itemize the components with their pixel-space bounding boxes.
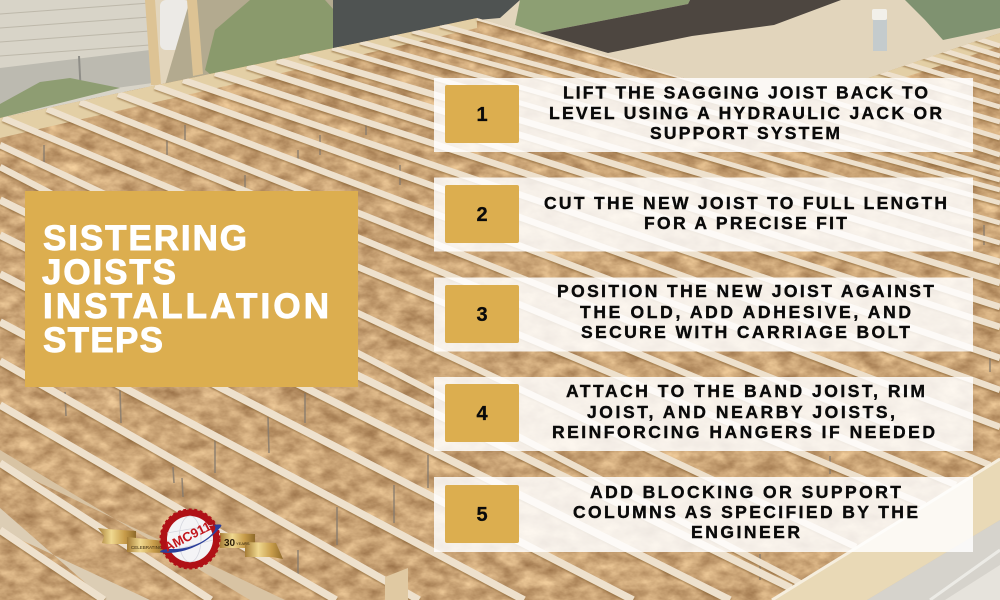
icon: vent pipe in sand xyxy=(872,9,887,51)
right ribbon: 30 xyxy=(224,538,236,549)
step 1 xyxy=(434,78,973,152)
title text xyxy=(42,219,329,360)
logo wordmark: AMC911 xyxy=(162,518,213,555)
step 5: 5 xyxy=(476,504,488,526)
step 3: POSITION THE NEW JOIST AGAINST xyxy=(557,281,934,301)
step 2: FOR A PRECISE FIT xyxy=(644,213,847,233)
step 4 xyxy=(434,377,973,451)
step 3: THE OLD, ADD ADHESIVE, AND xyxy=(580,302,911,322)
step 5: ADD BLOCKING OR SUPPORT xyxy=(590,482,901,502)
step 1: SUPPORT SYSTEM xyxy=(650,123,840,143)
left ribbon xyxy=(98,528,165,553)
photo background: site behind the floor xyxy=(0,0,1000,130)
right ribbon xyxy=(220,533,283,559)
globe xyxy=(167,516,213,562)
left ribbon: CELEBRATING xyxy=(131,545,163,550)
lumber blocks along far rim xyxy=(0,18,477,138)
beige planks lower left xyxy=(0,450,285,600)
step 3: SECURE WITH CARRIAGE BOLT xyxy=(581,322,910,342)
title text: SISTERING xyxy=(43,219,247,258)
darker seams on joist webs xyxy=(44,120,990,580)
title text: INSTALLATION xyxy=(43,287,329,326)
step 1: LEVEL USING A HYDRAULIC JACK OR xyxy=(549,103,942,123)
step 2: CUT THE NEW JOIST TO FULL LENGTH xyxy=(544,193,947,213)
photo: near rim board and concrete wall xyxy=(772,458,1000,600)
step 3: 3 xyxy=(476,304,488,326)
photo: upright stud at bottom xyxy=(385,568,408,600)
blue swoosh xyxy=(160,525,221,553)
red rosette xyxy=(160,510,220,568)
step 2: 2 xyxy=(476,204,488,226)
logo: AMC911 celebrating 30 years badge xyxy=(98,510,283,568)
step 4: REINFORCING HANGERS IF NEEDED xyxy=(552,422,935,442)
step 5 xyxy=(434,477,973,552)
title text: JOISTS xyxy=(42,253,176,292)
step 4: ATTACH TO THE BAND JOIST, RIM xyxy=(566,381,925,401)
step 4: 4 xyxy=(476,403,488,425)
step 5: ENGINEER xyxy=(691,522,800,542)
step 1: LIFT THE SAGGING JOIST BACK TO xyxy=(563,82,928,102)
step 5: COLUMNS AS SPECIFIED BY THE xyxy=(573,502,918,522)
right ribbon: YEARS xyxy=(236,541,250,546)
step 3 xyxy=(434,278,973,352)
step 1: 1 xyxy=(476,104,488,126)
step 2 xyxy=(434,178,973,252)
step 4: JOIST, AND NEARBY JOISTS, xyxy=(587,402,895,422)
title text: STEPS xyxy=(43,321,163,360)
title panel xyxy=(25,191,358,387)
